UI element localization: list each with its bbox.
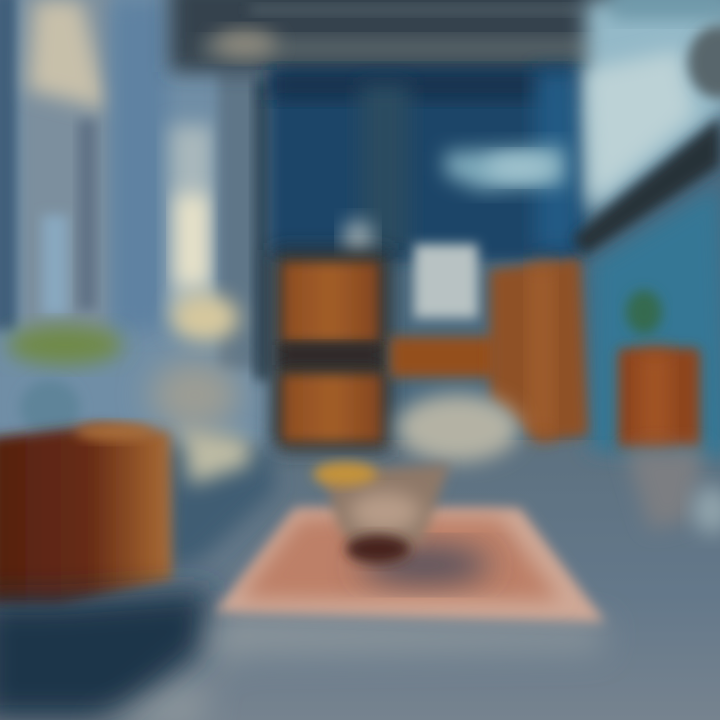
panel: right blue wall xyxy=(590,185,720,460)
window: glowing pane on blue wall xyxy=(445,145,565,190)
beam: dark diagonal ceiling beam xyxy=(572,118,720,255)
bowl: glass bowl with dark coffee xyxy=(313,462,450,563)
sofa: blue seating along left xyxy=(160,420,275,570)
cabinet: central wooden unit xyxy=(272,250,390,450)
cabinet: large wooden sideboard at left xyxy=(0,423,172,605)
artwork: pale panel between cabinets xyxy=(414,244,478,318)
pendant lamp: dark globe at top right xyxy=(688,26,720,98)
panel: deep blue back wall xyxy=(270,70,582,260)
panel: dark ceiling xyxy=(170,0,620,72)
plant: potted plant on right xyxy=(618,290,700,448)
panel: left wall with windows xyxy=(0,0,280,450)
rug: peach patterned rug xyxy=(215,508,605,622)
chair: pale seat at far right xyxy=(625,448,720,534)
shadow: dark blue floor shadow at lower left xyxy=(0,590,210,720)
cabinet: right wooden unit xyxy=(390,258,588,442)
floor highlight: pale strip along rug front xyxy=(90,615,605,720)
lamp: pale shade on back wall xyxy=(343,220,373,260)
flowers: pale blossoms by window xyxy=(150,294,240,430)
panel: bright right window xyxy=(585,0,720,215)
table: pale round table behind bowl xyxy=(396,394,520,462)
plant: green plant with blue vase on left xyxy=(7,325,123,436)
